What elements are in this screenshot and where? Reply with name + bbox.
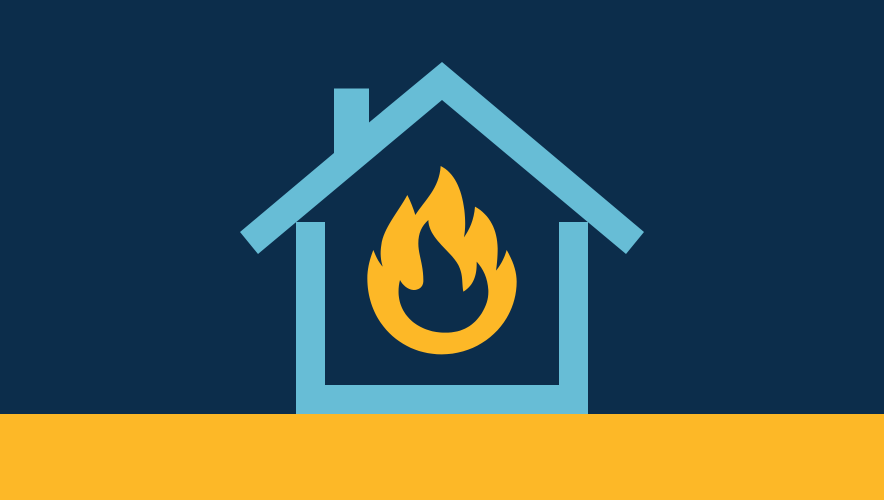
icon: house [240, 62, 644, 414]
ground band [0, 414, 884, 500]
house roof with chimney [240, 62, 644, 254]
icon: flame [367, 166, 517, 354]
house walls [296, 222, 588, 414]
